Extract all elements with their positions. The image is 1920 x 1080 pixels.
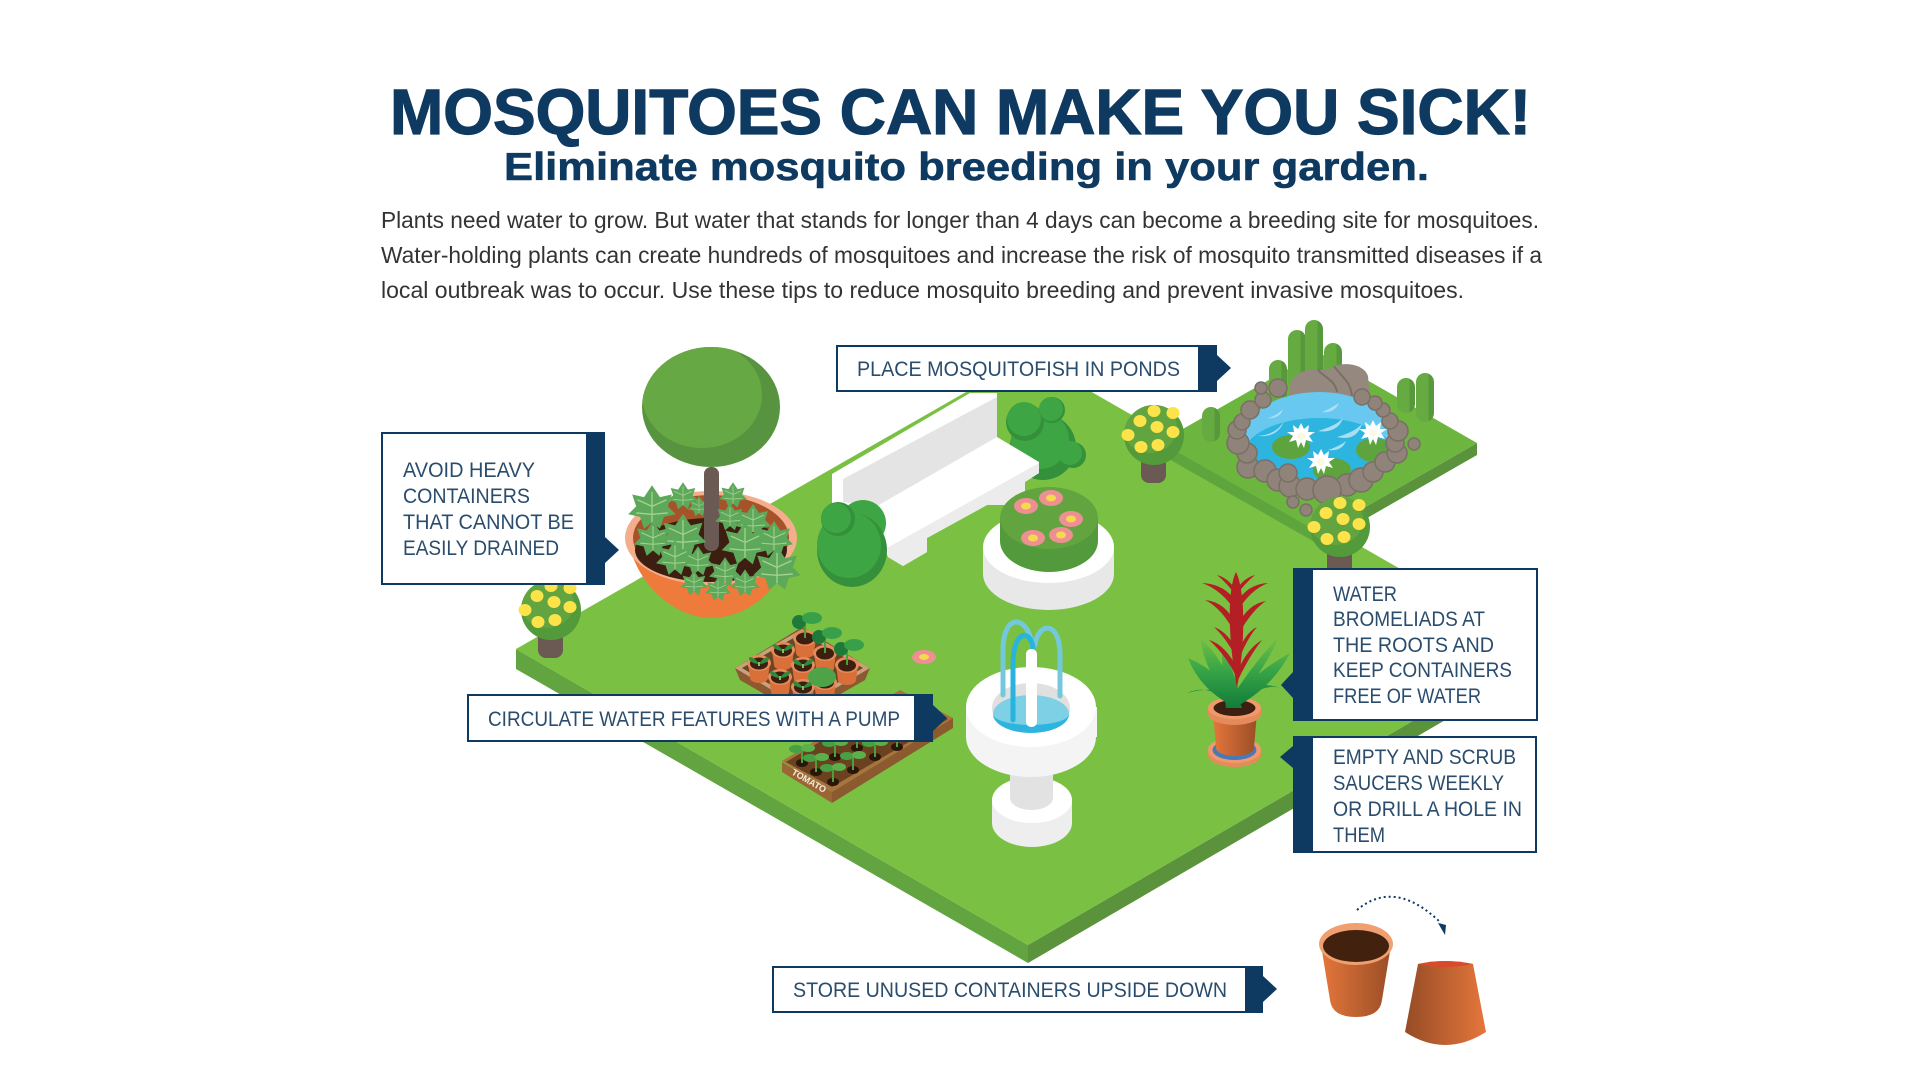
callout: mosquitofish: PLACE MOSQUITOFISH IN PONDS [857, 358, 1180, 381]
pot and saucer [1208, 697, 1261, 767]
subtitle: Eliminate mosquito breeding in your garden. [504, 146, 1429, 189]
seedling tomato tray [782, 690, 953, 803]
flower planter [983, 487, 1114, 610]
callout: empty saucers: EMPTY AND SCRUB [1333, 746, 1516, 769]
shrub left of bench [817, 500, 887, 587]
callout: avoid heavy containers: AVOID HEAVY [403, 459, 535, 482]
callout: empty saucers: SAUCERS WEEKLY [1333, 772, 1504, 795]
hidden ivy leaf behind trunk [688, 496, 710, 516]
pond with lilies and rocks [1227, 364, 1420, 516]
upright terracotta pot [1319, 923, 1393, 1017]
single pink flower [912, 650, 936, 664]
callout: water bromeliads: WATER [1333, 583, 1397, 606]
callout: empty saucers: THEM [1333, 824, 1385, 847]
intro paragraph: Water-holding plants can create hundreds of mosquitoes and increase the risk of mosquito transmitted diseases if a [381, 242, 1542, 268]
callout: empty saucers: OR DRILL A HOLE IN [1333, 798, 1522, 821]
pond plot [1160, 352, 1477, 545]
ivy leaves [628, 482, 801, 601]
callout: avoid heavy containers [381, 432, 619, 585]
ivy bowl [625, 491, 797, 618]
shrub right of bench [1006, 397, 1086, 480]
intro paragraph [381, 207, 1542, 303]
callout: avoid heavy containers: CONTAINERS [403, 485, 530, 508]
water jets [1003, 622, 1060, 720]
callout: water bromeliads: THE ROOTS AND [1333, 634, 1494, 657]
callout: avoid heavy containers: THAT CANNOT BE [403, 511, 574, 534]
title: MOSQUITOES CAN MAKE YOU SICK! [390, 76, 1531, 148]
yellow flower bush left [518, 578, 581, 658]
red flower spike [1202, 572, 1268, 688]
seedling pots tray [735, 612, 870, 716]
yellow flower bush top [1122, 403, 1184, 483]
intro paragraph: local outbreak was to occur. Use these tips to reduce mosquito breeding and prevent invasive mosquitoes. [381, 277, 1464, 303]
callout: mosquitofish [836, 345, 1231, 392]
water lilies [1287, 420, 1387, 474]
callout: water bromeliads: FREE OF WATER [1333, 685, 1481, 708]
yellow flower bush by pond [1308, 495, 1370, 575]
dotted flip arrow [1357, 897, 1446, 935]
callout: empty saucers [1280, 736, 1537, 853]
intro paragraph: Plants need water to grow. But water that stands for longer than 4 days can become a breeding site for mosquitoes. [381, 207, 1539, 233]
bench [832, 393, 1039, 566]
fountain [966, 622, 1097, 847]
inverted terracotta pot [1405, 961, 1486, 1045]
lily pads [1272, 435, 1392, 482]
garden lawn platform [516, 356, 1538, 963]
rocks [1227, 379, 1420, 516]
bromeliad plant [1187, 572, 1290, 767]
callout: store containers [772, 966, 1277, 1013]
callout: circulate water: CIRCULATE WATER FEATURES WITH A PUMP [488, 708, 900, 731]
green leaves [1187, 635, 1290, 708]
callout: circulate water [467, 694, 947, 742]
callout: water bromeliads: BROMELIADS AT [1333, 608, 1485, 631]
tomato tag: TOMATO [790, 767, 828, 795]
callout: avoid heavy containers: EASILY DRAINED [403, 537, 559, 560]
callout: water bromeliads [1281, 568, 1538, 721]
cacti behind pond [1202, 320, 1434, 442]
tree [642, 342, 780, 551]
callout: water bromeliads: KEEP CONTAINERS [1333, 659, 1512, 682]
callout: store containers: STORE UNUSED CONTAINERS UPSIDE DOWN [793, 979, 1227, 1002]
